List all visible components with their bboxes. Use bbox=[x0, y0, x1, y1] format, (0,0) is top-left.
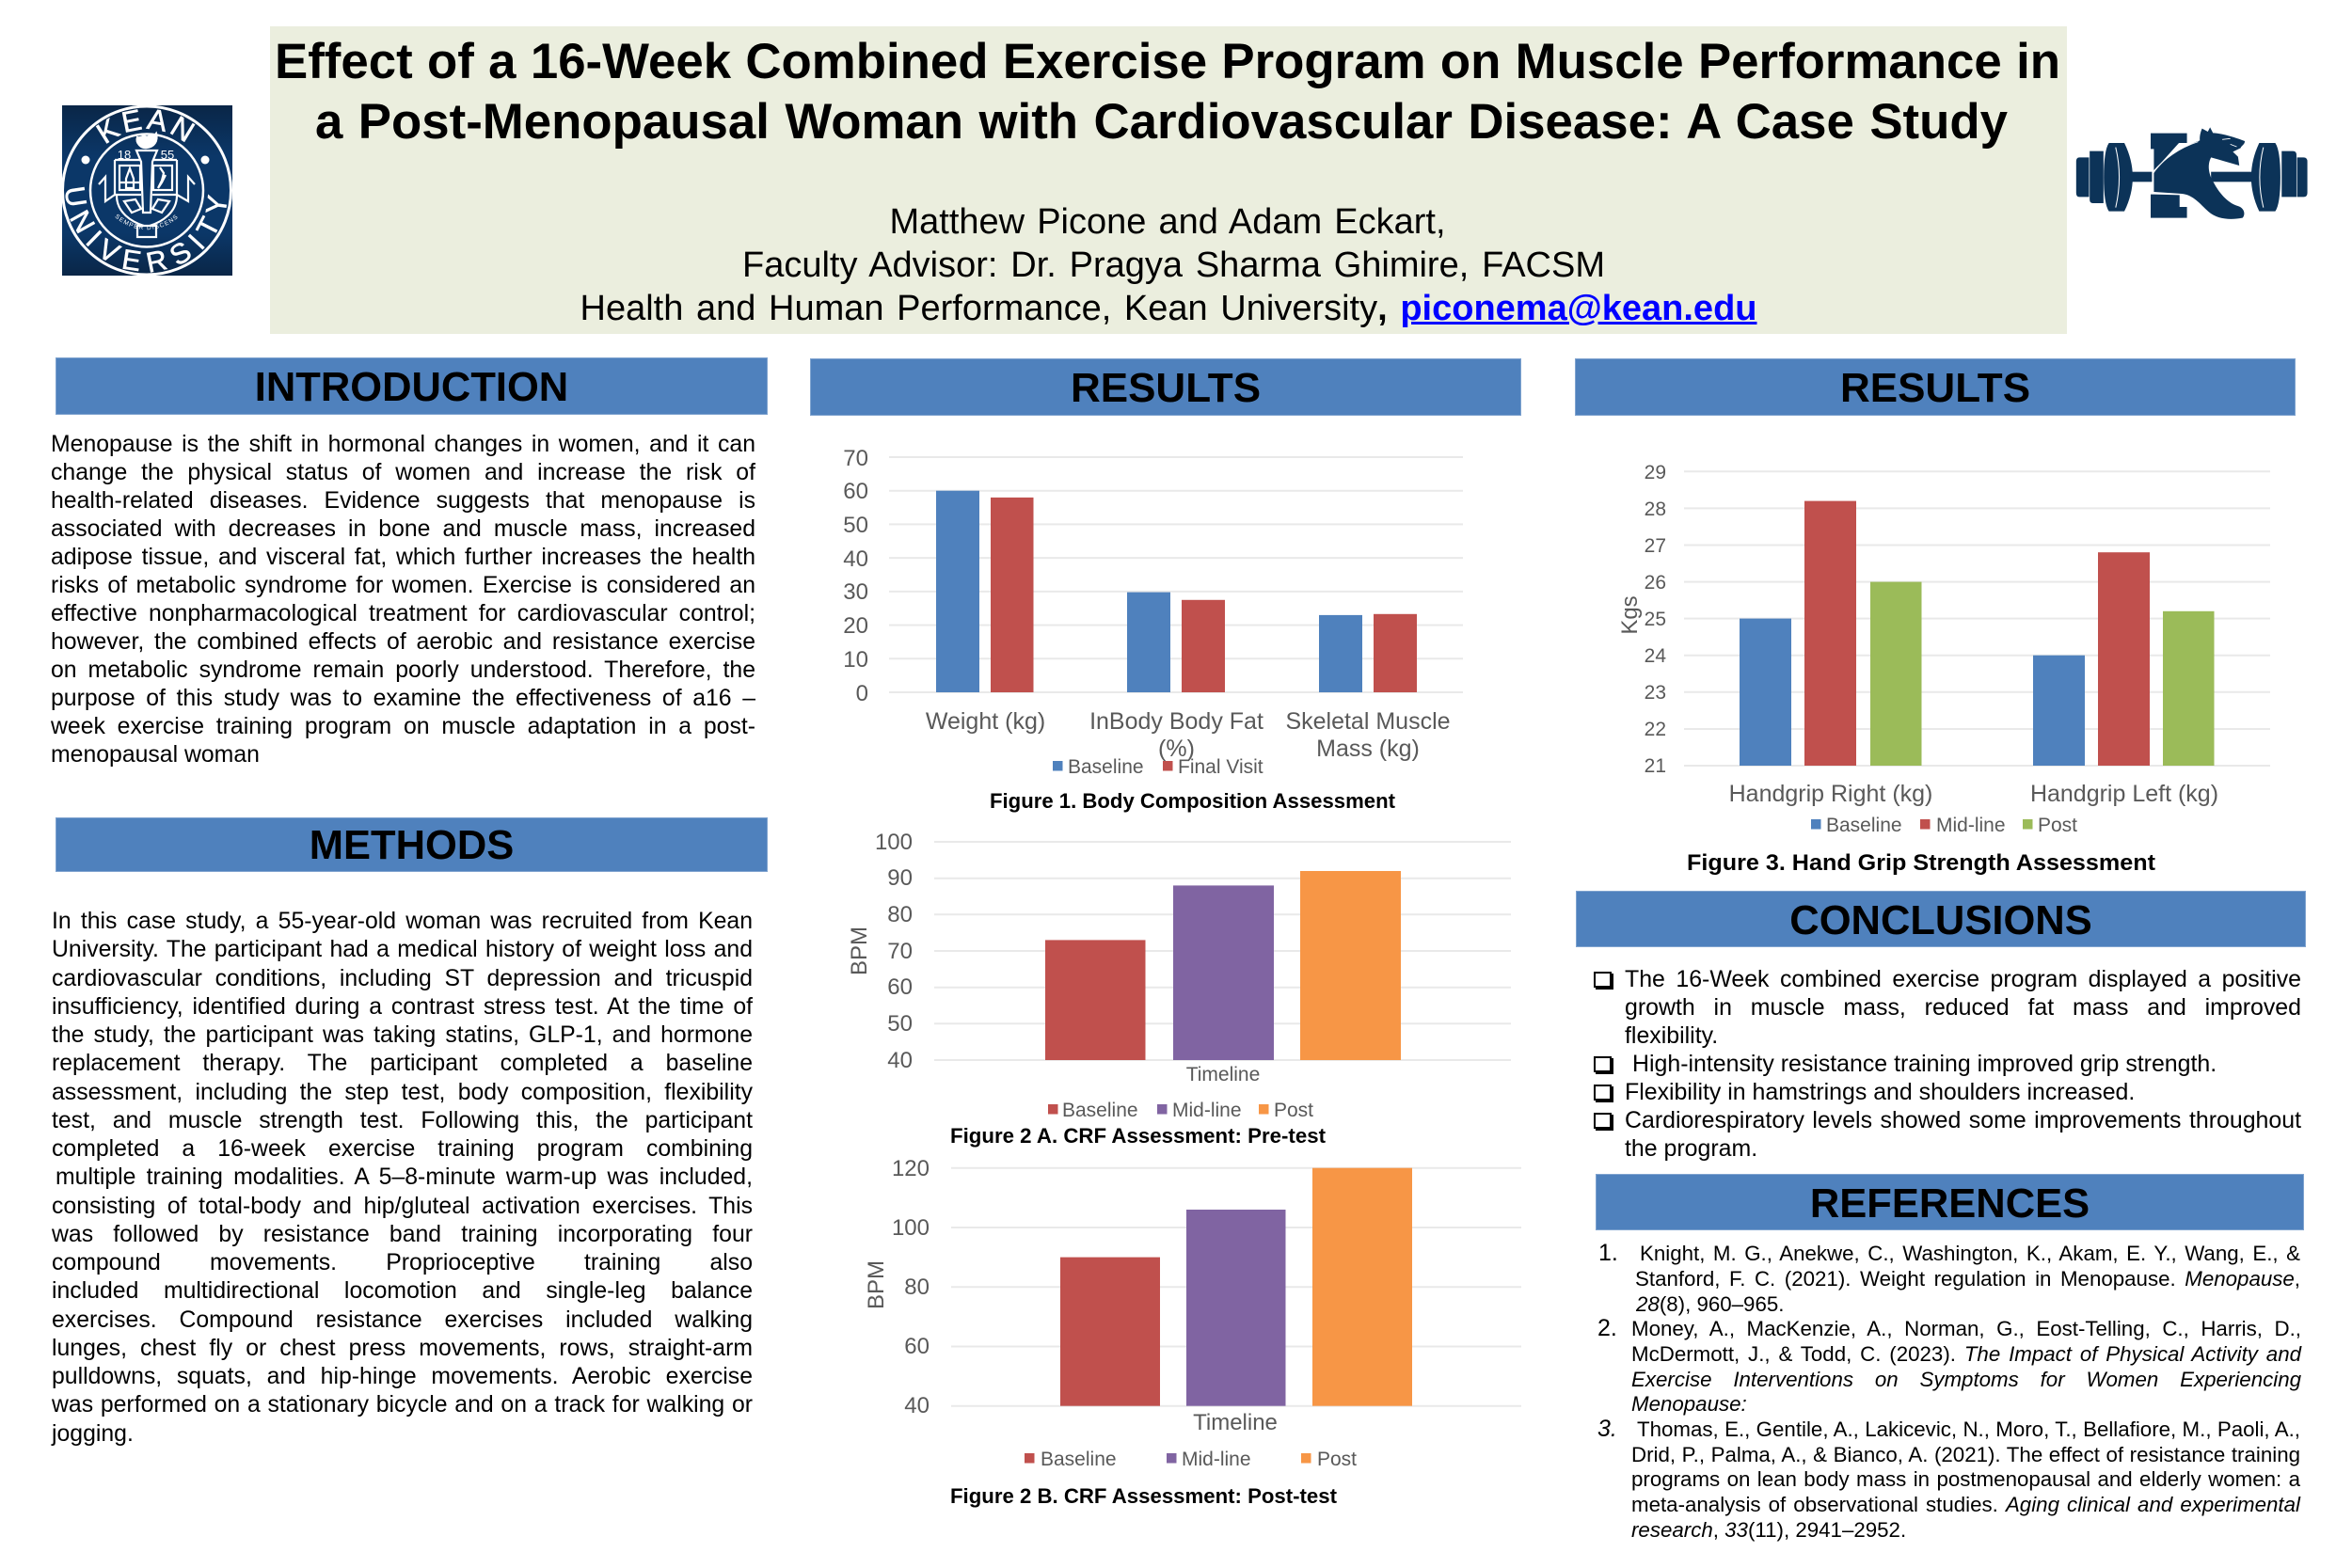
text block: methods: In this case study, a 55-year-old woman was recruited from Kean bbox=[52, 909, 753, 934]
category labels: Mass (kg) bbox=[1316, 736, 1420, 762]
y axis title: Kgs bbox=[1617, 595, 1643, 635]
text block: methods: cardiovascular conditions, including ST depression and tricuspid bbox=[52, 966, 753, 991]
conclusion 1 bbox=[1625, 966, 2301, 1049]
text block: methods: assessment, including the step test, body composition, flexibility bbox=[52, 1080, 753, 1105]
text block: methods: completed a 16-week exercise training program combining bbox=[52, 1136, 753, 1162]
text block: introduction: on metabolic syndrome remain poorly understood. Therefore, the bbox=[51, 657, 755, 683]
y axis labels: 10 bbox=[843, 647, 868, 673]
legend bbox=[1053, 756, 1263, 778]
conclusion 4 bbox=[1625, 1107, 2301, 1162]
legend: Post bbox=[2038, 815, 2077, 836]
y axis labels: 50 bbox=[843, 513, 868, 538]
number 2: 2. bbox=[1597, 1315, 1617, 1341]
category labels: Skeletal Muscle bbox=[1285, 708, 1451, 735]
legend bbox=[1025, 1449, 1357, 1470]
text block: introduction: menopausal woman bbox=[51, 742, 260, 768]
faculty advisor: Faculty Advisor: Dr. Pragya Sharma Ghimire, FACSM bbox=[742, 245, 1605, 285]
conclusion 3: Flexibility in hamstrings and shoulders increased. bbox=[1625, 1079, 2135, 1105]
text block: introduction: adipose tissue, and visceral fat, which further increases the health bbox=[51, 545, 755, 570]
conclusion 1: flexibility. bbox=[1625, 1022, 1718, 1049]
title line 2: a Post-Menopausal Woman with Cardiovascular Disease: A Case Study bbox=[315, 94, 2008, 150]
legend: Mid-line bbox=[1172, 1100, 1242, 1121]
text block: methods: replacement therapy. The participant completed a baseline bbox=[52, 1051, 753, 1076]
reference 1 bbox=[1635, 1242, 2300, 1316]
conclusion 1: growth in muscle mass, reduced fat mass and improved bbox=[1625, 994, 2301, 1021]
affiliation and email: Health and Human Performance, Kean University, piconema@kean.edu bbox=[580, 289, 1757, 328]
conclusion 2: High-intensity resistance training improved grip strength. bbox=[1632, 1051, 2217, 1077]
reference 1: Knight, M. G., Anekwe, C., Washington, K., Akam, E. Y., Wang, E., & bbox=[1640, 1242, 2300, 1265]
legend: Final Visit bbox=[1178, 756, 1263, 778]
heading: results, right column: RESULTS bbox=[1840, 365, 2030, 411]
text block: methods: the study, the participant was taking statins, GLP-1, and hormone bbox=[52, 1022, 753, 1048]
y axis labels: 120 bbox=[892, 1156, 930, 1181]
y axis labels bbox=[875, 830, 913, 1073]
legend: Mid-line bbox=[1182, 1449, 1251, 1470]
text block: introduction: associated with decreases in bone and muscle mass, increased bbox=[51, 516, 755, 542]
y axis labels: 21 bbox=[1645, 755, 1666, 777]
reference 3: Drid, P., Palma, A., & Bianco, A. (2021). The effect of resistance training bbox=[1631, 1443, 2300, 1466]
text block: methods: pulldowns, squats, and hip-hinge movements. Aerobic exercise bbox=[52, 1364, 753, 1389]
y axis labels: 90 bbox=[887, 865, 913, 891]
y axis labels: 80 bbox=[887, 902, 913, 927]
reference 2 bbox=[1631, 1317, 2302, 1416]
y axis labels: 100 bbox=[875, 830, 913, 855]
text block: introduction: purpose of this study was to examine the effectiveness of a16 – bbox=[51, 686, 755, 711]
conclusion 1: The 16-Week combined exercise program displayed a positive bbox=[1625, 966, 2301, 992]
checkbox 4 bbox=[1594, 1113, 1612, 1129]
text block: methods: exercises. Compound resistance exercises included walking bbox=[52, 1307, 753, 1333]
text block: methods bbox=[51, 909, 753, 1447]
text block: methods: was performed on a stationary bicycle and on a track for walking or bbox=[52, 1392, 753, 1418]
reference 2: Money, A., MacKenzie, A., Norman, G., Eost-Telling, C., Harris, D., bbox=[1631, 1317, 2301, 1340]
legend bbox=[1811, 815, 2077, 836]
legend: Baseline bbox=[1062, 1100, 1138, 1121]
y axis labels: 40 bbox=[887, 1048, 913, 1073]
heading: results, right column bbox=[1575, 358, 2296, 416]
y axis labels: 29 bbox=[1645, 462, 1666, 483]
y axis labels: 40 bbox=[904, 1393, 930, 1418]
text block: introduction bbox=[51, 432, 756, 768]
y axis labels: 70 bbox=[887, 939, 913, 964]
bars bbox=[1060, 1168, 1412, 1406]
y axis labels: 50 bbox=[887, 1011, 913, 1037]
y axis labels: 23 bbox=[1645, 682, 1666, 704]
text block: methods: consisting of total-body and hip/gluteal activation exercises. This bbox=[52, 1194, 753, 1219]
chart: figure 2A CRF pre-test bbox=[847, 830, 1511, 1148]
y axis labels: 30 bbox=[843, 579, 868, 605]
list: conclusions bbox=[1594, 966, 2301, 1162]
heading: results, middle column: RESULTS bbox=[1071, 365, 1261, 411]
text block: introduction: risks of metabolic syndrome for women. Exercise is considered an bbox=[51, 573, 755, 598]
category labels: InBody Body Fat bbox=[1089, 708, 1263, 735]
reference 3 bbox=[1631, 1418, 2301, 1542]
reference 2: Exercise Interventions on Symptoms for Women Experiencing bbox=[1631, 1368, 2301, 1391]
text block: methods: insufficiency, identified during a contrast stress test. At the time of bbox=[52, 994, 753, 1020]
caption: Figure 1. Body Composition Assessment bbox=[990, 789, 1396, 813]
y axis labels: 40 bbox=[843, 546, 868, 572]
category label: Timeline bbox=[1186, 1064, 1260, 1085]
category labels bbox=[926, 708, 1451, 762]
reference 2: McDermott, J., & Todd, C. (2023). The Impact of Physical Activity and bbox=[1631, 1342, 2301, 1366]
logo: Kean University seal: KEAN bbox=[96, 109, 196, 144]
y axis labels: 70 bbox=[843, 446, 868, 471]
heading: conclusions: CONCLUSIONS bbox=[1789, 898, 2092, 943]
bars bbox=[1045, 871, 1401, 1060]
y axis labels: 60 bbox=[887, 974, 913, 1000]
y axis labels: 24 bbox=[1645, 645, 1666, 667]
chart: figure 3 hand grip strength bbox=[1617, 462, 2270, 876]
text block: introduction: change the physical status of women and increase the risk of bbox=[51, 460, 755, 485]
conclusion 4: Cardiorespiratory levels showed some improvements throughout bbox=[1625, 1107, 2301, 1133]
heading: introduction bbox=[56, 357, 768, 415]
text block: methods: University. The participant had a medical history of weight loss and bbox=[52, 937, 753, 962]
heading: introduction: INTRODUCTION bbox=[255, 365, 568, 410]
reference 1: Stanford, F. C. (2021). Weight regulation in Menopause. Menopause, bbox=[1635, 1267, 2300, 1291]
text block: introduction: week exercise training program on muscle adaptation in a post- bbox=[51, 714, 755, 739]
list: references bbox=[1597, 1240, 2302, 1542]
title panel bbox=[270, 26, 2067, 334]
text block: methods: included multidirectional locomotion and single-leg balance bbox=[52, 1278, 753, 1304]
y axis labels: 27 bbox=[1645, 535, 1666, 557]
authors: Matthew Picone and Adam Eckart, bbox=[890, 202, 1445, 242]
reference 3: research, 33(11), 2941–2952. bbox=[1631, 1518, 1906, 1542]
legend: Mid-line bbox=[1936, 815, 2006, 836]
title line 1: Effect of a 16-Week Combined Exercise Program on Muscle Performance in bbox=[275, 34, 2060, 89]
category label: Timeline bbox=[1193, 1410, 1278, 1435]
text block: introduction: effective nonpharmacological treatment for cardiovascular control; bbox=[51, 601, 755, 626]
reference 3: programs on lean body mass in postmenopausal and elderly women: a bbox=[1631, 1467, 2300, 1491]
y axis labels bbox=[843, 446, 868, 706]
conclusion 4: the program. bbox=[1625, 1135, 1757, 1162]
y axis labels bbox=[892, 1156, 930, 1418]
caption: Figure 3. Hand Grip Strength Assessment bbox=[1687, 850, 2155, 876]
checkbox 2 bbox=[1594, 1056, 1612, 1072]
bars bbox=[936, 491, 1417, 692]
y axis labels: 60 bbox=[904, 1334, 930, 1359]
heading: references: REFERENCES bbox=[1810, 1181, 2090, 1227]
y axis labels bbox=[1645, 462, 1666, 777]
checkbox 1 bbox=[1594, 972, 1612, 988]
legend: Post bbox=[1317, 1449, 1357, 1470]
text block: introduction: Menopause is the shift in hormonal changes in women, and it can bbox=[51, 432, 755, 457]
text block: methods: was followed by resistance band training incorporating four bbox=[52, 1222, 753, 1247]
y axis labels: 20 bbox=[843, 613, 868, 639]
heading: conclusions bbox=[1576, 891, 2306, 947]
reference 1: 28(8), 960–965. bbox=[1636, 1292, 1784, 1316]
legend: Post bbox=[1274, 1100, 1313, 1121]
heading: references bbox=[1596, 1174, 2304, 1230]
checkbox 3 bbox=[1594, 1085, 1612, 1101]
y axis labels: 80 bbox=[904, 1275, 930, 1300]
text block: methods: compound movements. Proprioceptive training also bbox=[52, 1250, 753, 1275]
y axis labels: 28 bbox=[1645, 499, 1666, 520]
reference 3: meta-analysis of observational studies. Aging clinical and experimental bbox=[1631, 1493, 2300, 1516]
logo: Kean University seal bbox=[62, 105, 232, 276]
heading: methods: METHODS bbox=[310, 823, 514, 868]
number 1: 1. bbox=[1598, 1240, 1618, 1266]
reference 3: Thomas, E., Gentile, A., Lakicevic, N., Moro, T., Bellafiore, M., Paoli, A., bbox=[1637, 1418, 2300, 1441]
y axis title: BPM bbox=[864, 1260, 889, 1309]
y axis labels: 60 bbox=[843, 479, 868, 504]
chart: figure 1 body composition bbox=[843, 446, 1463, 813]
text block: methods: test, and muscle strength test. Following this, the participant bbox=[52, 1108, 753, 1133]
text block: methods: lunges, chest fly or chest press movements, rows, straight-arm bbox=[52, 1336, 753, 1361]
legend: Baseline bbox=[1826, 815, 1902, 836]
chart: figure 2B CRF post-test bbox=[864, 1156, 1521, 1508]
category labels: Handgrip Left (kg) bbox=[2030, 781, 2218, 807]
legend bbox=[1048, 1100, 1313, 1121]
legend: Baseline bbox=[1041, 1449, 1117, 1470]
text block: methods: multiple training modalities. A 5–8-minute warm-up was included, bbox=[56, 1164, 753, 1190]
category labels: (%) bbox=[1158, 736, 1195, 762]
logo: Kean University seal: SEMPER DISCENS bbox=[115, 214, 177, 230]
logo: Kean University seal: 18 bbox=[118, 148, 131, 162]
reference 2: Menopause: bbox=[1631, 1392, 1747, 1416]
text block: methods: jogging. bbox=[52, 1421, 134, 1447]
y axis labels: 22 bbox=[1645, 719, 1666, 740]
text block: introduction: health-related diseases. Evidence suggests that menopause is bbox=[51, 488, 755, 514]
category labels: Weight (kg) bbox=[926, 708, 1045, 735]
y axis title: BPM bbox=[847, 927, 872, 975]
category labels bbox=[1729, 781, 2218, 807]
heading: methods bbox=[56, 817, 768, 872]
number 3: 3. bbox=[1597, 1416, 1617, 1442]
logo: barbell and cougar K bbox=[2075, 128, 2308, 219]
caption: Figure 2 B. CRF Assessment: Post-test bbox=[950, 1484, 1338, 1508]
caption: Figure 2 A. CRF Assessment: Pre-test bbox=[950, 1124, 1327, 1148]
bars bbox=[1740, 501, 2215, 766]
y axis labels: 25 bbox=[1645, 609, 1666, 630]
heading: results, middle column bbox=[810, 358, 1521, 416]
y axis labels: 26 bbox=[1645, 572, 1666, 594]
legend: Baseline bbox=[1068, 756, 1144, 778]
y axis labels: 100 bbox=[892, 1215, 930, 1241]
category labels: Handgrip Right (kg) bbox=[1729, 781, 1932, 807]
text block: introduction: however, the combined effects of aerobic and resistance exercise bbox=[51, 629, 755, 655]
logo: Kean University seal: 55 bbox=[161, 148, 174, 162]
logo: Kean University seal: UNIVERSITY bbox=[66, 186, 227, 273]
y axis labels: 0 bbox=[856, 681, 868, 706]
